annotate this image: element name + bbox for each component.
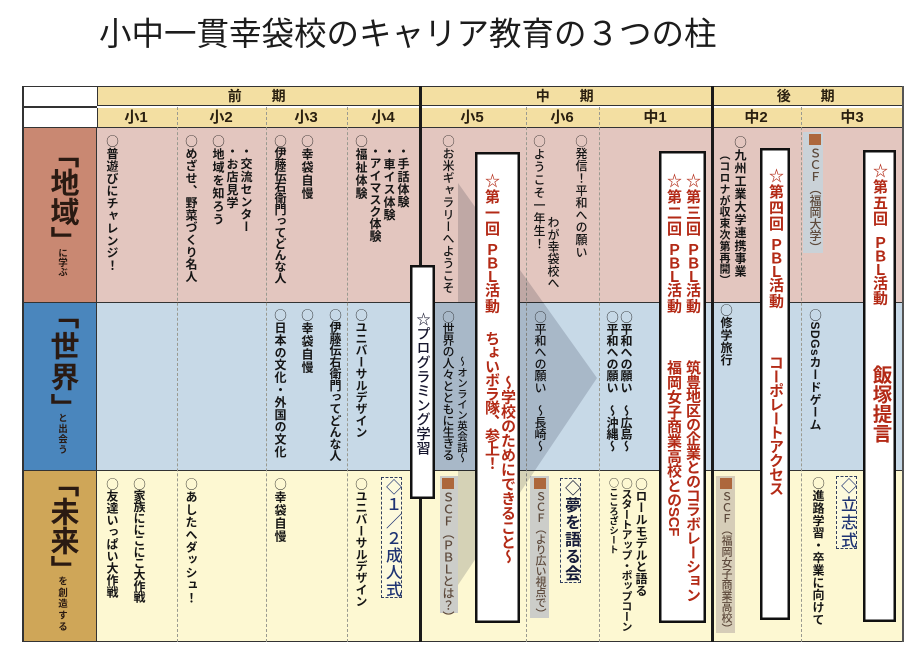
activity: ◯平和への願い ～長崎～: [533, 311, 547, 451]
row subheading: を創造する: を創造する: [56, 576, 67, 633]
activity: ◯発信！平和への願い: [574, 135, 588, 258]
activity: ◯平和への願い ～沖縄～: [605, 311, 619, 451]
period label: 後期: 後 期: [777, 88, 835, 104]
activity: ◯こころざシート: [607, 478, 618, 554]
SCF text: ＳＣＦ（ＰＢＬとは？）: [441, 491, 455, 623]
activity: ◯あしたへダッシュ！: [184, 478, 198, 604]
callout: PBL 1: [475, 152, 520, 623]
callout heading and theme: ☆第一回 ＰＢＬ 活動 ちょいボラ隊、参上！: [483, 173, 500, 469]
grade label: 中3: 中3: [840, 109, 864, 126]
callout: PBL 2 and 3: [659, 151, 706, 623]
callout text: SCF with commercial high school: 福岡女子商業高校とのSCF: [665, 360, 682, 536]
activity: ◯ロールモデルと語る: [634, 478, 648, 596]
row heading: 未来: 「未来」: [46, 468, 78, 584]
SCF text: ＳＣＦ（福岡女子商業高校）: [720, 491, 732, 634]
grade label: 小1: 小1: [124, 109, 148, 126]
activity: わが幸袋校へ: [546, 216, 560, 289]
header rows: periods and grades: [22, 86, 903, 127]
activity: ◯平和への願い ～広島～: [619, 311, 633, 451]
activity: ◯めざせ、野菜づくり名人: [184, 135, 198, 283]
ceremony: 夢を語る会: [560, 478, 581, 583]
activity: ・アイマスク体験: [368, 145, 382, 242]
panel: row 未来: [22, 470, 903, 642]
activity: ◯伊藤伝右衛門ってどんな人: [328, 309, 342, 461]
grade label: 小5: 小5: [460, 109, 484, 126]
activity: ◯日本の文化・外国の文化: [273, 309, 287, 458]
callout: programming learning: [410, 265, 435, 499]
activity: ◯幸袋自慢: [300, 309, 314, 374]
activity: ◯世界の人々とともに生きる: [441, 311, 455, 460]
ceremony: 立志式: [836, 476, 857, 549]
ceremony text: ◇夢を語る会: [562, 480, 579, 582]
activity: ◯幸袋自慢: [273, 478, 287, 543]
row heading: 世界: 「世界」: [46, 300, 78, 424]
ceremony text: ◇１／２成人式: [383, 479, 400, 598]
activity: ◯スタートアップ・ポップコーン: [620, 478, 632, 631]
SCF text: ＳＣＦ（より広い視点で）: [534, 491, 546, 618]
activity: ◯九州工業大学連携事業: [733, 136, 747, 278]
row heading: 地域: 「地域」: [46, 139, 78, 255]
SCF tag: [530, 476, 549, 618]
panel: row 世界: [22, 302, 903, 470]
period label: 中期: 中 期: [536, 88, 594, 104]
callout: PBL 5: [863, 150, 896, 622]
grade label: 小4: 小4: [371, 109, 395, 126]
ceremony: 1/2成人式: [381, 477, 402, 598]
panel: row 地域: [22, 127, 903, 302]
header band: grades: [97, 108, 903, 128]
row subheading: に学ぶ: に学ぶ: [56, 248, 67, 276]
activity: ◯ようこそ一年生！: [532, 135, 546, 250]
callout text: 飯塚提言: [869, 365, 891, 443]
activity: ・交流センター: [239, 145, 253, 233]
grade label: 小3: 小3: [294, 109, 318, 126]
row subheading: と出会う: と出会う: [56, 413, 67, 455]
callout text: コーポレートアクセス: [767, 355, 784, 495]
activity: ◯友達いっぱい大作戦: [105, 478, 119, 598]
activity: ・車イス体験: [382, 145, 396, 221]
activity: ◯伊藤伝右衛門ってどんな人: [273, 135, 287, 283]
activity: ◯家族ににこにこ大作戦: [132, 478, 146, 602]
callout heading: PBL 2: ☆第二回 ＰＢＬ 活動: [665, 173, 682, 314]
ceremony text: ◇立志式: [838, 478, 855, 550]
grade label: 小6: 小6: [550, 109, 574, 126]
callout text: collaboration: 筑豊地区の企業とのコラボレーション: [684, 360, 701, 601]
grade label: 中2: 中2: [744, 109, 768, 126]
SCF tag: [716, 476, 735, 633]
callout: PBL 4: [760, 148, 790, 620]
activity: ◯ユニバーサルデザイン: [354, 478, 368, 607]
grade label: 中1: 中1: [643, 109, 667, 126]
activity: ◯進路学習・卒業に向けて: [811, 477, 825, 626]
activity: ◯お米ギャラリーへようこそ: [441, 135, 455, 294]
title: 小中一貫幸袋校のキャリア教育の３つの柱: [99, 16, 717, 52]
activity note: （コロナが収束次第再開）: [718, 149, 730, 286]
callout heading: ☆第五回 ＰＢＬ 活動: [871, 163, 888, 306]
activity: ◯福祉体験: [354, 135, 368, 200]
activity: ・お店見学: [225, 145, 239, 209]
row label: 世界と出会う: [22, 303, 97, 470]
row label: 未来を創造する: [22, 471, 97, 641]
activity: ◯SDGsカードゲーム: [808, 309, 822, 431]
period label: 前期: 前 期: [228, 88, 286, 104]
activity: ◯地域を知ろう: [211, 135, 225, 226]
activity: ◯ユニバーサルデザイン: [354, 309, 368, 438]
SCF text: ＳＣＦ（福岡大学）: [808, 147, 822, 253]
activity: ～オンライン英会話～: [456, 356, 468, 463]
empty corner cell line: [22, 106, 97, 108]
SCF tag: [440, 476, 458, 613]
row label: 地域に学ぶ: [22, 128, 97, 302]
activity: ・手話体験: [396, 145, 410, 208]
grade label: 小2: 小2: [209, 109, 233, 126]
activity: ◯幸袋自慢: [300, 135, 314, 200]
activity: ◯修学旅行: [719, 304, 733, 366]
activity: ◯普遊びにチャレンジ！: [105, 135, 119, 271]
SCF tag: [803, 132, 823, 253]
callout text: ☆プログラミング学習: [414, 312, 430, 455]
header band: periods: [97, 87, 903, 106]
callout subtext: ～学校のためにできること～: [499, 375, 516, 564]
callout heading: ☆第四回 ＰＢＬ 活動: [767, 168, 784, 310]
callout heading: PBL 3: ☆第三回 ＰＢＬ 活動: [684, 173, 701, 314]
